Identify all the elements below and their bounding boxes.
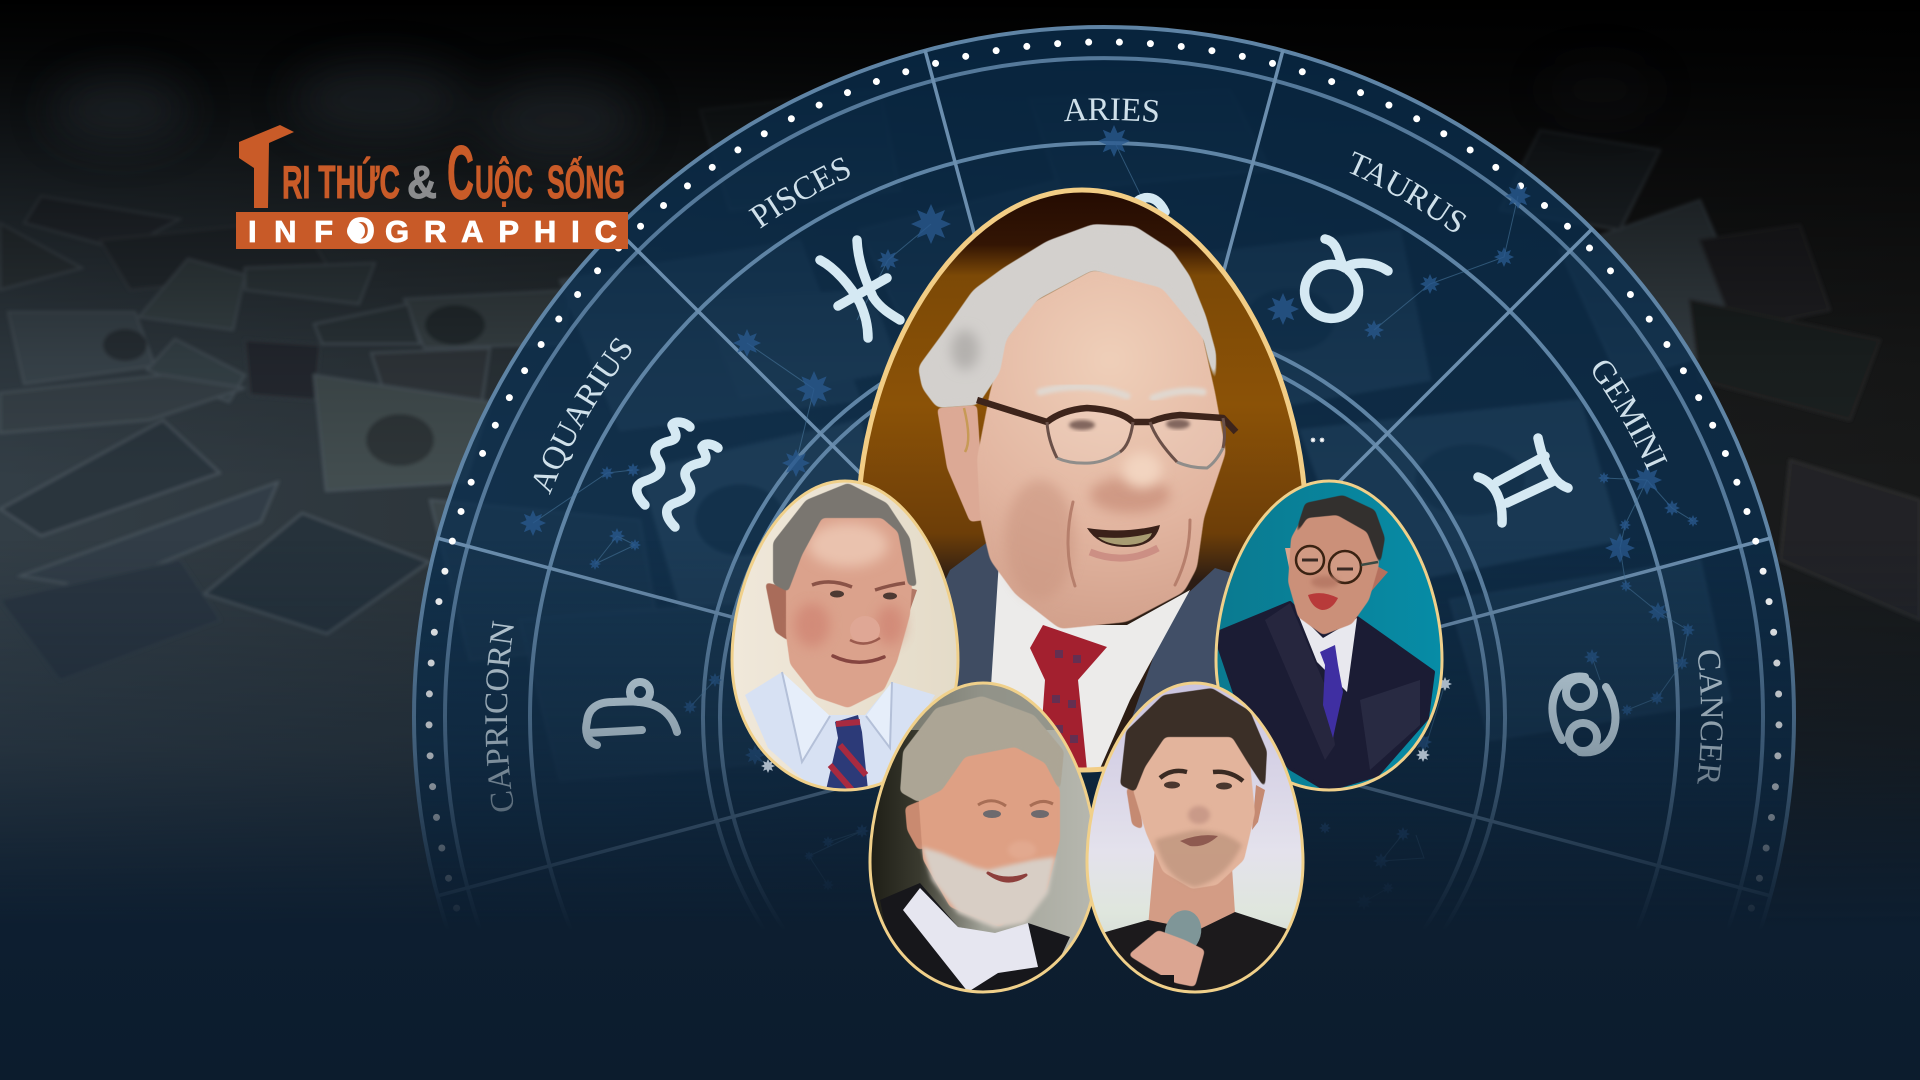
label: Aquarius: AQUARIUS — [534, 338, 632, 495]
wheel rings — [414, 27, 1794, 960]
portrait: Evan Spiegel — [1080, 680, 1310, 1000]
portrait: Roman Abramovich — [865, 680, 1105, 1000]
emblem dot — [347, 222, 365, 240]
pale foreground stars — [761, 437, 1452, 773]
Zhong portrait frame — [1216, 481, 1442, 790]
background: soft clouds of distant bills — [50, 60, 1660, 160]
banner text: O — [347, 210, 375, 251]
label: Pisces: PISCES — [748, 157, 850, 228]
wheel spokes — [437, 50, 1771, 896]
constellation stars — [520, 125, 1699, 910]
label: Cancer: CANCER — [1697, 650, 1723, 784]
Abramovich portrait frame — [870, 683, 1096, 992]
portrait: Warren Buffett — [850, 185, 1320, 785]
zodiac name labels — [485, 98, 1723, 812]
label: Aries: ARIES — [1064, 98, 1158, 122]
icon: Aquarius — [637, 422, 718, 527]
constellation lines — [533, 141, 1693, 902]
wordmark: Tri thuc: RI THỨC — [282, 156, 400, 208]
icon: Gemini — [1478, 438, 1568, 523]
label: Gemini: GEMINI — [1593, 360, 1668, 470]
wheel dots ring — [429, 42, 1779, 966]
icon: Aries — [1128, 198, 1165, 215]
banner text: INF — [248, 214, 333, 249]
wheel disc — [413, 26, 1795, 960]
icon: Capricorn — [586, 682, 677, 745]
label: Capricorn: CAPRICORN — [485, 620, 514, 812]
wordmark: ampersand: & — [407, 156, 437, 208]
wordmark: uoc: UỘC — [475, 156, 533, 208]
icon: Pisces — [820, 240, 900, 338]
icon: Taurus — [1305, 239, 1388, 318]
background: top darkness — [0, 0, 1920, 480]
logo: Tri thuc & Cuoc song Infographic — [236, 125, 628, 251]
wordmark: song: SỐNG — [547, 156, 625, 208]
portrait: Michael Bloomberg — [725, 475, 965, 795]
Buffett portrait frame — [858, 190, 1306, 770]
zodiac glyphs — [586, 198, 1615, 752]
logo wordmark — [282, 131, 625, 216]
bottom fade over wheel — [0, 520, 1920, 1080]
portrait: Zhong Shanshan — [1210, 475, 1450, 795]
zodiac wheel — [412, 25, 1796, 994]
logo wordmark: C — [447, 131, 474, 216]
Spiegel portrait frame — [1087, 683, 1303, 992]
icon: Cancer — [1552, 677, 1615, 752]
icon: logo roof mark — [239, 125, 294, 208]
label: Taurus: TAURUS — [1350, 151, 1466, 232]
background: scattered money bills — [0, 90, 1920, 780]
banner text: GRAPHIC — [385, 214, 617, 249]
infographic banner — [236, 210, 628, 251]
Bloomberg portrait frame — [732, 481, 958, 790]
